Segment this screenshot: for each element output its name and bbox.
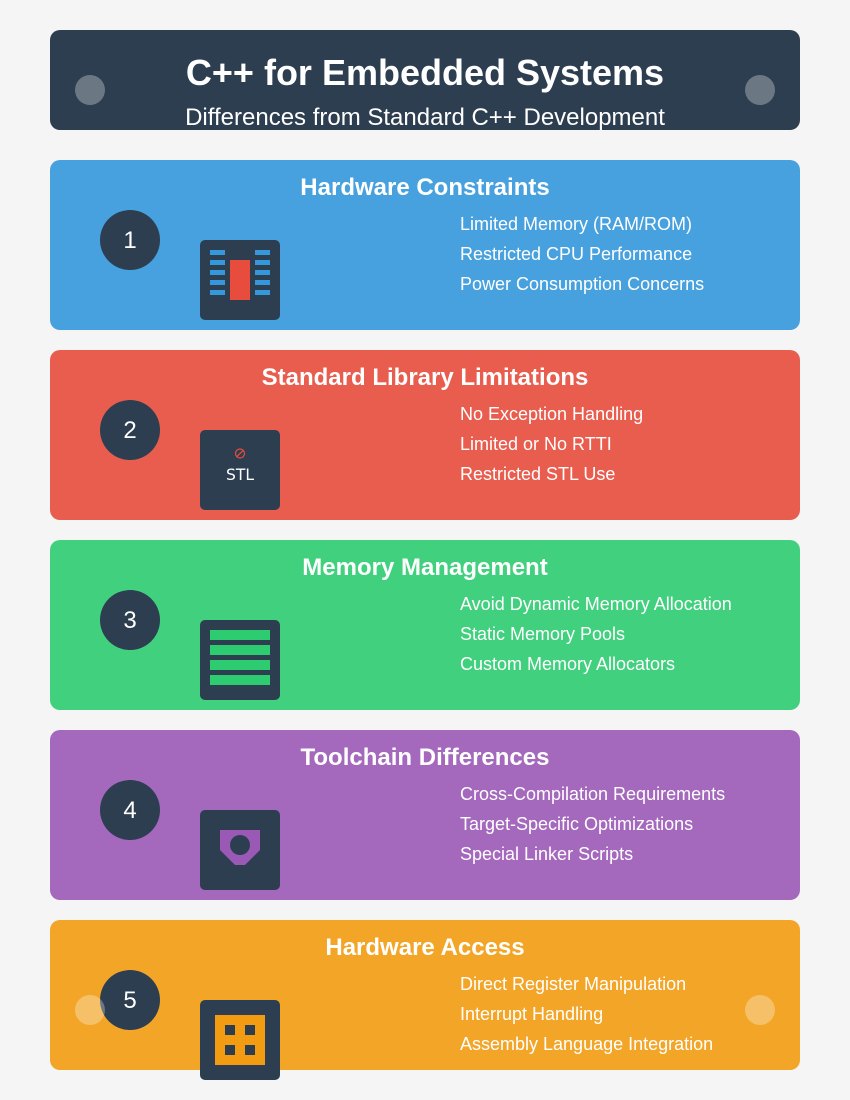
icon: no STL	[200, 430, 280, 510]
bullet list: Static Memory Pools	[460, 624, 625, 644]
panel: hardware constraints	[50, 160, 800, 330]
number badge 4	[100, 780, 160, 840]
bullet list: Assembly Language Integration	[460, 1034, 713, 1054]
icon: register grid	[200, 1000, 280, 1080]
bullet list: Target-Specific Optimizations	[460, 814, 693, 834]
decorative dots	[75, 995, 775, 1025]
bullet list: Avoid Dynamic Memory Allocation	[460, 594, 732, 614]
bullet list	[460, 214, 704, 294]
icon: microchip	[200, 240, 280, 320]
heading: Toolchain Differences	[301, 744, 549, 771]
number badge 5: 5	[123, 987, 137, 1014]
number badge 2: 2	[123, 417, 137, 444]
number badge 1: 1	[123, 227, 137, 254]
bullet list: Special Linker Scripts	[460, 844, 633, 864]
heading: Hardware Access	[325, 934, 525, 961]
heading: Standard Library Limitations	[262, 364, 588, 391]
bullet list: Limited Memory (RAM/ROM)	[460, 214, 692, 234]
bullet list: Direct Register Manipulation	[460, 974, 686, 994]
number badge 3: 3	[123, 607, 137, 634]
panel: memory management	[50, 540, 800, 710]
number badge 3	[100, 590, 160, 650]
bullet list: Restricted CPU Performance	[460, 244, 692, 264]
header banner	[50, 30, 800, 131]
panel: toolchain differences	[50, 730, 800, 900]
bullet list: Power Consumption Concerns	[460, 274, 704, 294]
number badge 2	[100, 400, 160, 460]
bullet list: Limited or No RTTI	[460, 434, 612, 454]
subtitle: Differences from Standard C++ Development	[185, 104, 665, 131]
icon: no STL: STL	[226, 465, 254, 484]
bullet list: Cross-Compilation Requirements	[460, 784, 725, 804]
bullet list	[460, 784, 725, 864]
bullet list	[460, 404, 643, 484]
heading: Memory Management	[302, 554, 548, 581]
panel: hardware access	[50, 920, 800, 1080]
bullet list: Custom Memory Allocators	[460, 654, 675, 674]
bullet list: Interrupt Handling	[460, 1004, 603, 1024]
bullet list: No Exception Handling	[460, 404, 643, 424]
number badge 5	[100, 970, 160, 1030]
bullet list	[460, 974, 713, 1054]
icon: memory stack	[200, 620, 280, 700]
number badge 4: 4	[123, 797, 137, 824]
number badge 1	[100, 210, 160, 270]
panel: standard library limitations	[50, 350, 800, 520]
icon: toolchain shield	[200, 810, 280, 890]
bullet list	[460, 594, 732, 674]
heading: Hardware Constraints	[300, 174, 550, 201]
bullet list: Restricted STL Use	[460, 464, 615, 484]
title: C++ for Embedded Systems	[186, 52, 664, 93]
